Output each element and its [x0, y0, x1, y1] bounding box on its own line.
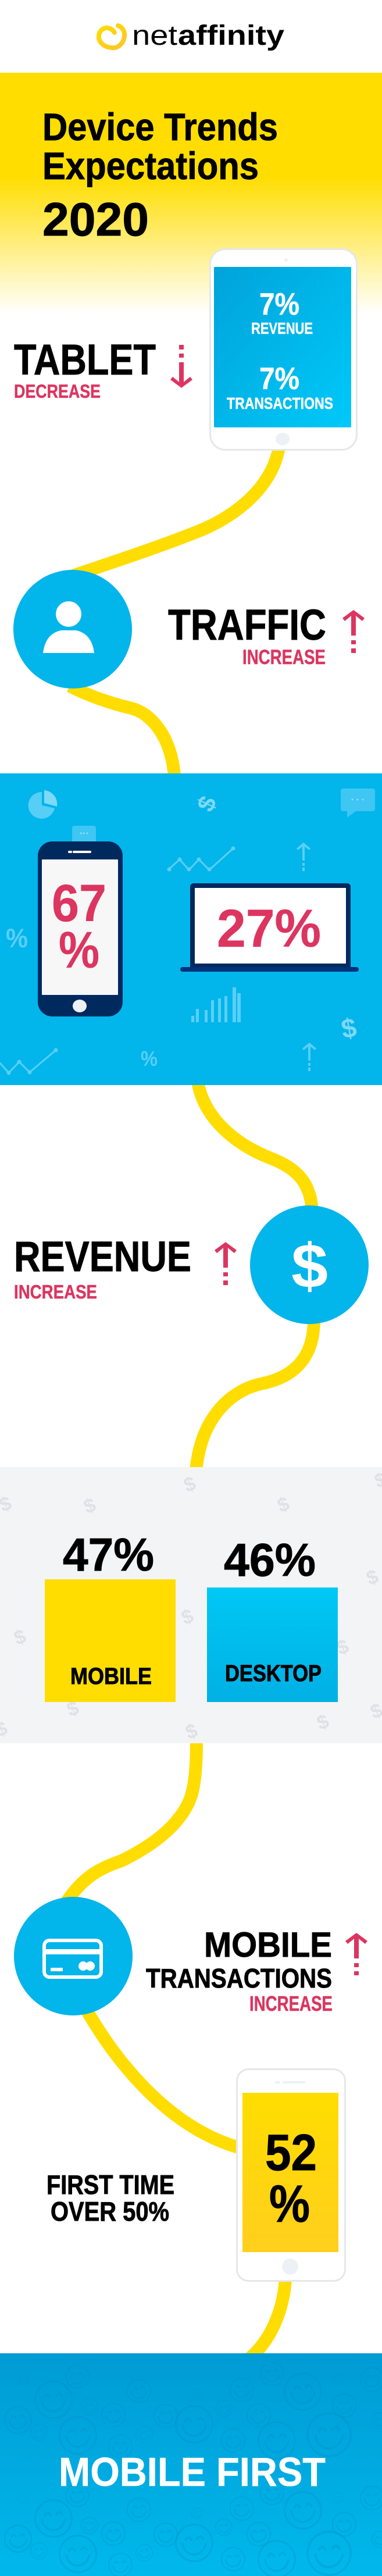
tablet section heading: TABLET	[14, 336, 156, 384]
yellow connecting path	[67, 448, 314, 2358]
bar: mobile	[45, 1579, 176, 1702]
title: Device Trends	[42, 105, 278, 148]
dollar pattern: $	[181, 1472, 199, 1497]
dollar pattern: $	[363, 1565, 381, 1590]
logo wordmark	[132, 20, 284, 51]
logo wordmark: affinity	[178, 20, 284, 51]
icon: dollar: $	[339, 1012, 359, 1044]
phone value: %	[59, 921, 99, 979]
icon: bar chart	[191, 987, 241, 1022]
smiley pattern	[4, 2413, 382, 2576]
tablet stats: TRANSACTIONS	[227, 394, 333, 412]
panel: revenue share	[0, 1467, 382, 1744]
tablet device	[210, 249, 357, 450]
arrow: traffic up	[342, 610, 365, 653]
phone: 67%	[38, 841, 123, 1016]
icon: dollar sign: $	[291, 1230, 328, 1301]
dollar pattern: $	[178, 1605, 197, 1629]
traffic circle icon	[13, 570, 132, 688]
icon: small bubble	[72, 826, 96, 843]
phone: 52%	[237, 2069, 345, 2281]
title: Expectations	[42, 144, 259, 187]
dollar pattern: $	[81, 1494, 99, 1518]
phone screen	[42, 859, 118, 995]
mobile transactions heading	[146, 1925, 333, 2015]
laptop screen	[195, 888, 346, 964]
arrow: tablet down	[170, 345, 192, 388]
dollar pattern: $	[183, 1719, 201, 1744]
icon: logo swirl	[99, 26, 124, 48]
icon: line chart left	[0, 1048, 58, 1075]
revenue heading: REVENUE	[14, 1233, 191, 1280]
icon: faint arrow up	[297, 843, 310, 871]
tablet stats: REVENUE	[251, 319, 313, 337]
icon: speech bubble	[341, 789, 375, 818]
icon: slanted dollar: $	[191, 792, 222, 816]
phone value	[52, 875, 106, 979]
tablet stats	[227, 287, 333, 412]
tablet home button	[276, 433, 290, 445]
revenue heading	[14, 1233, 191, 1303]
traffic heading	[168, 601, 326, 669]
header gradient band	[0, 73, 382, 314]
phone value: 52	[265, 2124, 317, 2181]
mobile transactions heading: TRANSACTIONS	[146, 1963, 332, 1993]
phone value: %	[269, 2175, 310, 2234]
callout: first time over 50%: OVER 50%	[51, 2196, 169, 2227]
icon: credit card	[44, 1940, 101, 1977]
dollar pattern: $	[274, 1493, 292, 1517]
tablet section heading	[14, 336, 156, 402]
dollar pattern: $	[64, 1697, 82, 1721]
tablet screen	[214, 267, 351, 427]
phone speaker	[275, 2081, 305, 2083]
icon: percent left: %	[6, 923, 28, 953]
icon: pie chart	[28, 790, 57, 819]
laptop: 27%	[180, 883, 359, 972]
decrease label: DECREASE	[14, 381, 101, 402]
logo	[99, 20, 284, 51]
increase label: INCREASE	[249, 1992, 333, 2015]
tablet camera	[284, 258, 288, 262]
dollar pattern	[0, 1468, 382, 1744]
tablet stats: 7%	[259, 362, 299, 396]
icon: person	[43, 601, 94, 653]
traffic heading: TRAFFIC	[168, 601, 326, 649]
phone speaker	[68, 851, 91, 853]
transactions circle icon	[14, 1897, 133, 2015]
icon: faint arrow up lower	[302, 1043, 316, 1071]
phone screen	[242, 2093, 338, 2252]
logo wordmark: net	[132, 20, 177, 51]
mobile transactions heading: MOBILE	[204, 1925, 332, 1964]
arrow: revenue up	[215, 1242, 237, 1285]
bar: mobile: MOBILE	[70, 1664, 152, 1689]
bar: desktop: DESKTOP	[225, 1661, 322, 1686]
tablet stats: 7%	[259, 287, 299, 322]
arrow: transactions up	[345, 1933, 367, 1975]
dollar pattern: $	[334, 1635, 352, 1660]
icon: percent lower: %	[141, 1047, 158, 1071]
desktop value: 46%	[224, 1534, 316, 1586]
revenue circle icon	[250, 1205, 369, 1324]
callout: first time over 50%: FIRST TIME	[47, 2170, 174, 2200]
increase label: INCREASE	[14, 1281, 97, 1303]
phone value: 67	[52, 875, 106, 933]
laptop base	[180, 967, 359, 972]
panel: mobile first footer	[0, 2353, 382, 2576]
panel: device traffic share	[0, 773, 382, 1085]
dollar pattern: $	[11, 1625, 29, 1650]
phone home button	[282, 2259, 298, 2275]
increase label: INCREASE	[242, 646, 326, 669]
title	[42, 105, 278, 246]
footer heading: MOBILE FIRST	[59, 2449, 326, 2495]
phone home button	[73, 1000, 87, 1012]
laptop value: 27%	[217, 899, 321, 958]
dollar pattern: $	[314, 1710, 332, 1735]
bar: desktop	[207, 1587, 338, 1702]
phone value	[265, 2124, 317, 2234]
callout: first time over 50%	[47, 2170, 174, 2227]
icon: line chart right	[167, 847, 235, 871]
mobile value: 47%	[63, 1529, 154, 1580]
title: 2020	[42, 194, 149, 246]
